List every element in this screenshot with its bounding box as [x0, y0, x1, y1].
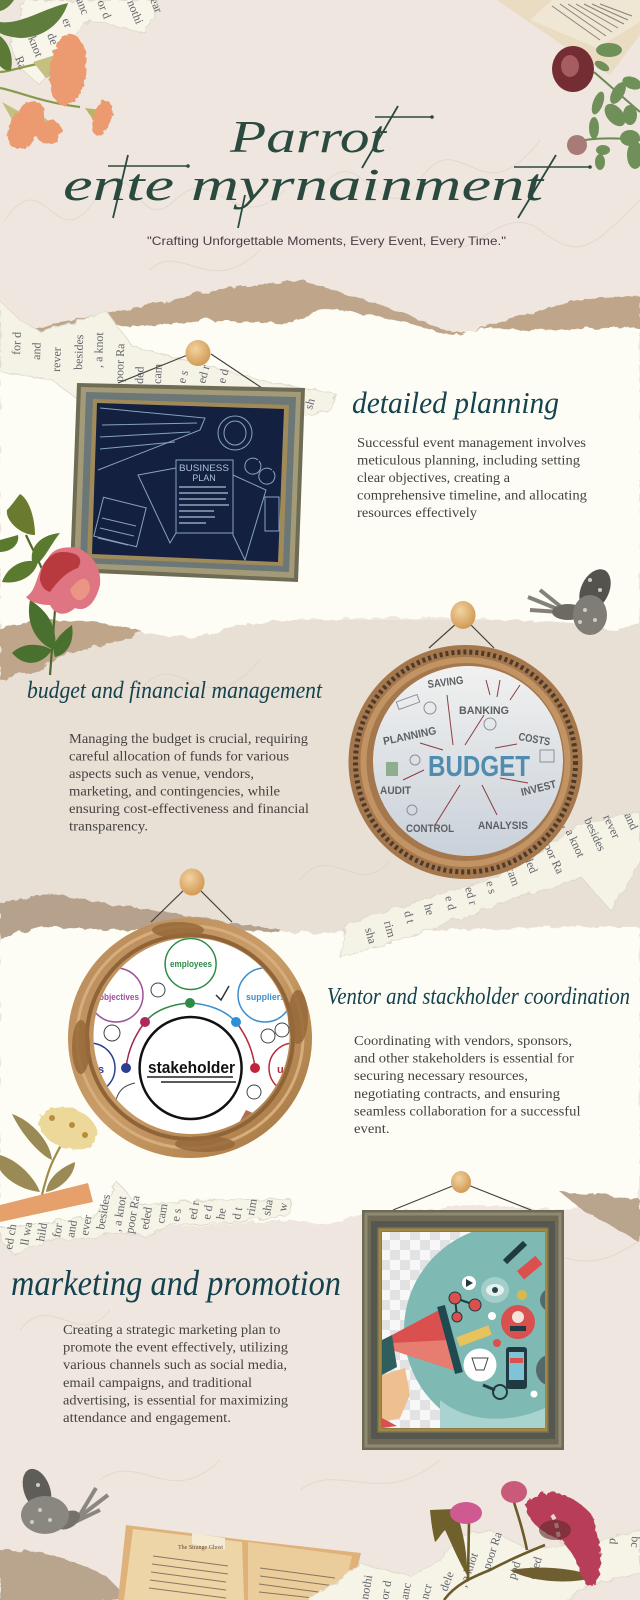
- newspaper strip: lower left: [0, 1182, 291, 1255]
- peg: [180, 868, 204, 896]
- newspaper strip: bottom right: eded: [525, 1555, 545, 1581]
- newspaper strip: right middle: , a knot: [560, 821, 588, 860]
- newspaper strip: lower left: besides: [93, 1193, 113, 1231]
- hanging round frame: stakeholder: s: [98, 1064, 104, 1076]
- newspaper strip: lower left: ll wa: [17, 1220, 35, 1247]
- newspaper strip: left of frame one: and: [29, 342, 44, 360]
- newspaper strip: right middle: besides: [581, 815, 609, 854]
- hanging frame: business plan: PLAN: [192, 473, 216, 483]
- hanging round frame: stakeholder: u: [277, 1064, 284, 1076]
- newspaper strip: lower left: for: [49, 1222, 65, 1239]
- torn edge: right tan fourth: [560, 1192, 640, 1243]
- hanging round frame: budget: INVEST: [520, 778, 558, 799]
- hanging round frame: stakeholder: suppliers: [246, 992, 285, 1003]
- newspaper strip: right middle: e d: [442, 894, 459, 912]
- newspaper strip: right middle: ded: [521, 854, 541, 875]
- newspaper strip: bottom right: poor Ra: [480, 1530, 505, 1571]
- main title: [63, 106, 592, 228]
- text block: marketing: Creating a strategic marketing plan to: [63, 1323, 280, 1338]
- newspaper strip: lower left: cam: [153, 1202, 171, 1225]
- newspaper strip: lower left: e s: [168, 1207, 184, 1223]
- text block: budget: careful allocation of funds for various: [69, 750, 289, 764]
- newspaper strip: bottom right: anc: [397, 1582, 414, 1600]
- text block: detailed planning: comprehensive timeline, and allocating: [357, 488, 587, 504]
- newspaper strip: right middle: rever: [600, 812, 623, 841]
- newspaper strip: right middle: ed r: [462, 885, 480, 906]
- text block: vendor coordination: Coordinating with vendors, sponsors,: [354, 1034, 572, 1049]
- hanging round frame: stakeholder: objectives: [99, 992, 139, 1003]
- newspaper strip: bottom right: , a knot: [456, 1550, 481, 1589]
- cream band two: [0, 926, 640, 1235]
- hanging round frame: budget: ANALYSIS: [478, 820, 528, 832]
- newspaper strip: lower left: sha: [259, 1198, 276, 1217]
- orange tape: [0, 1183, 93, 1222]
- newspaper strip: lower left: e d: [199, 1204, 215, 1221]
- newspaper strip: left of frame one: [0, 301, 335, 416]
- butterfly one: [528, 564, 617, 635]
- main title: Parrot: [229, 111, 388, 162]
- torn edge: top tan: [0, 280, 640, 345]
- peg: [451, 1171, 471, 1193]
- book: bottom: [118, 1525, 361, 1600]
- newspaper strip: lower left: rim: [243, 1197, 260, 1217]
- text block: marketing: email campaigns, and traditional: [63, 1376, 252, 1391]
- newspaper strip: bottom right: d: [606, 1538, 621, 1545]
- newspaper strip: top left: knot: [25, 34, 46, 60]
- text block: marketing: attendance and engagement.: [63, 1411, 231, 1426]
- flower: pink rose: [0, 494, 100, 675]
- newspaper strip: top left: [10, 0, 166, 85]
- peg: [186, 340, 210, 366]
- text block: budget: Managing the budget is crucial, requiring: [69, 732, 308, 747]
- newspaper strip: bottom right: dele: [437, 1569, 457, 1593]
- hanging round frame: budget: PLANNING: [382, 725, 437, 748]
- text block: budget: aspects such as venue, vendors,: [69, 767, 254, 782]
- hanging frame: business plan: [70, 340, 305, 582]
- newspaper strip: lower left: , a knot: [109, 1194, 129, 1233]
- heading: budget and financial management: budget and financial management: [27, 678, 323, 704]
- flower: yellow dried sprig with tape: [0, 1099, 103, 1222]
- newspaper strip: top left: er: [59, 16, 76, 30]
- peg: [450, 601, 476, 629]
- newspaper strip: lower left: poor Ra: [122, 1194, 143, 1235]
- text block: detailed planning: Successful event management involves: [357, 436, 586, 451]
- text block: detailed planning: meticulous planning, including setting: [357, 454, 580, 468]
- newspaper strip: bottom right: pod: [505, 1559, 523, 1581]
- subtitle: "Crafting Unforgettable Moments, Every Event, Every Time.": [147, 234, 506, 248]
- newspaper strip: left of frame one: poor Ra: [112, 343, 127, 382]
- hanging frame: marketing: [362, 1171, 564, 1450]
- newspaper strip: left of frame one: e s: [174, 368, 191, 385]
- heading: marketing and promotion: marketing and promotion: [11, 1263, 341, 1303]
- book: bottom: The Strange Ghost: [178, 1545, 223, 1551]
- hanging round frame: stakeholder: employees: [170, 959, 212, 969]
- text block: detailed planning: [357, 436, 587, 521]
- butterfly two: [17, 1465, 108, 1534]
- hanging round frame: stakeholder: stakeholder: [148, 1058, 235, 1077]
- hanging round frame: budget: BANKING: [459, 705, 509, 717]
- text block: vendor coordination: negotiating contracts, and ensuring: [354, 1087, 560, 1102]
- newspaper strip: top left: de: [44, 31, 61, 47]
- text block: marketing: advertising, is essential for maximizing: [63, 1394, 288, 1408]
- newspaper strip: left of frame one: besides: [71, 334, 86, 370]
- hanging round frame: stakeholder: [65, 868, 319, 1158]
- text block: vendor coordination: and other stakeholders is essential for: [354, 1052, 574, 1066]
- newspaper strip: right middle: d t: [401, 909, 418, 925]
- text block: vendor coordination: securing necessary resources,: [354, 1069, 528, 1084]
- text block: vendor coordination: event.: [354, 1122, 390, 1137]
- newspaper strip: lower left: hild: [33, 1222, 50, 1243]
- newspaper strip: right middle: cam: [503, 864, 523, 888]
- newspaper strip: left of frame one: rever: [49, 347, 64, 372]
- newspaper strip: right middle: e s: [483, 879, 500, 896]
- hanging round frame: budget: CONTROL: [406, 823, 454, 835]
- text block: budget: marketing, and contingencies, while: [69, 784, 280, 800]
- marketing artwork: [382, 1232, 545, 1428]
- text block: marketing: [63, 1323, 288, 1426]
- flower: pink dried sprig: [430, 1481, 601, 1600]
- main title: ente myrnainment: [63, 159, 545, 210]
- newspaper strip: left of frame one: e d: [214, 367, 232, 385]
- text block: vendor coordination: [354, 1034, 581, 1137]
- newspaper strip: bottom right: [300, 1530, 640, 1600]
- flowers: orange sprig top left: [0, 0, 116, 155]
- hanging round frame: budget: [348, 601, 582, 879]
- newspaper strip: lower left: w: [275, 1201, 291, 1213]
- hanging round frame: budget: SAVING: [427, 675, 464, 691]
- newspaper strip: left of frame one: , a knot: [91, 331, 106, 368]
- torn edge: left tan second: [0, 620, 143, 680]
- text block: vendor coordination: seamless collaboration for a successful: [354, 1104, 581, 1120]
- newspaper strip: lower left: eded: [137, 1206, 155, 1231]
- text block: budget: ensuring cost-effectiveness and financial: [69, 802, 309, 817]
- newspaper strip: lower left: d t: [229, 1205, 245, 1221]
- hanging round frame: budget: BUDGET: [428, 751, 530, 783]
- torn edge: third tan: [0, 893, 281, 945]
- newspaper strip: lower left: ed ch: [1, 1223, 19, 1251]
- newspaper strip: bottom right: nothi: [357, 1573, 375, 1600]
- newspaper strip: left of frame one: cam: [150, 363, 165, 384]
- text block: marketing: promote the event effectively, utilizing: [63, 1340, 288, 1356]
- newspaper strip: top left: Ra: [12, 54, 30, 72]
- newspaper strip: left of frame one: for d: [9, 332, 24, 355]
- book: top right: [497, 0, 640, 75]
- text block: budget: transparency.: [69, 820, 148, 834]
- newspaper strip: lower left: he: [213, 1207, 229, 1221]
- cream band one: [0, 308, 640, 640]
- newspaper strip: left of frame one: sh: [301, 397, 318, 411]
- hanging frame: business plan: BUSINESS: [179, 463, 229, 473]
- newspaper strip: left of frame one: ed r: [194, 363, 213, 385]
- newspaper strip: right middle: rim: [381, 919, 399, 940]
- newspaper strip: lower left: and: [63, 1219, 80, 1239]
- hanging round frame: budget: AUDIT: [380, 785, 411, 797]
- newspaper strip: right middle: sha: [362, 926, 380, 946]
- newspaper strip: right middle: poor Ra: [538, 835, 567, 877]
- heading: detailed planning: detailed planning: [352, 385, 559, 420]
- board sketch: [94, 408, 279, 560]
- text block: marketing: various channels such as social media,: [63, 1358, 287, 1373]
- text block: budget: [69, 732, 309, 834]
- newspaper strip: left of frame one: ded: [132, 366, 147, 384]
- flower: dark red rose top right: [552, 43, 640, 170]
- text block: detailed planning: clear objectives, creating a: [357, 471, 511, 486]
- newspaper strip: bottom right: or d: [377, 1579, 394, 1600]
- newspaper strip: lower left: ever: [77, 1214, 95, 1237]
- newspaper strip: right middle: he: [421, 902, 438, 917]
- text block: detailed planning: resources effectively: [357, 506, 477, 521]
- newspaper strip: lower left: ed r: [185, 1200, 202, 1221]
- newspaper strip: right middle: [340, 810, 640, 957]
- torn edge: bottom left tan: [0, 1550, 130, 1600]
- hanging round frame: budget: COSTS: [517, 731, 551, 749]
